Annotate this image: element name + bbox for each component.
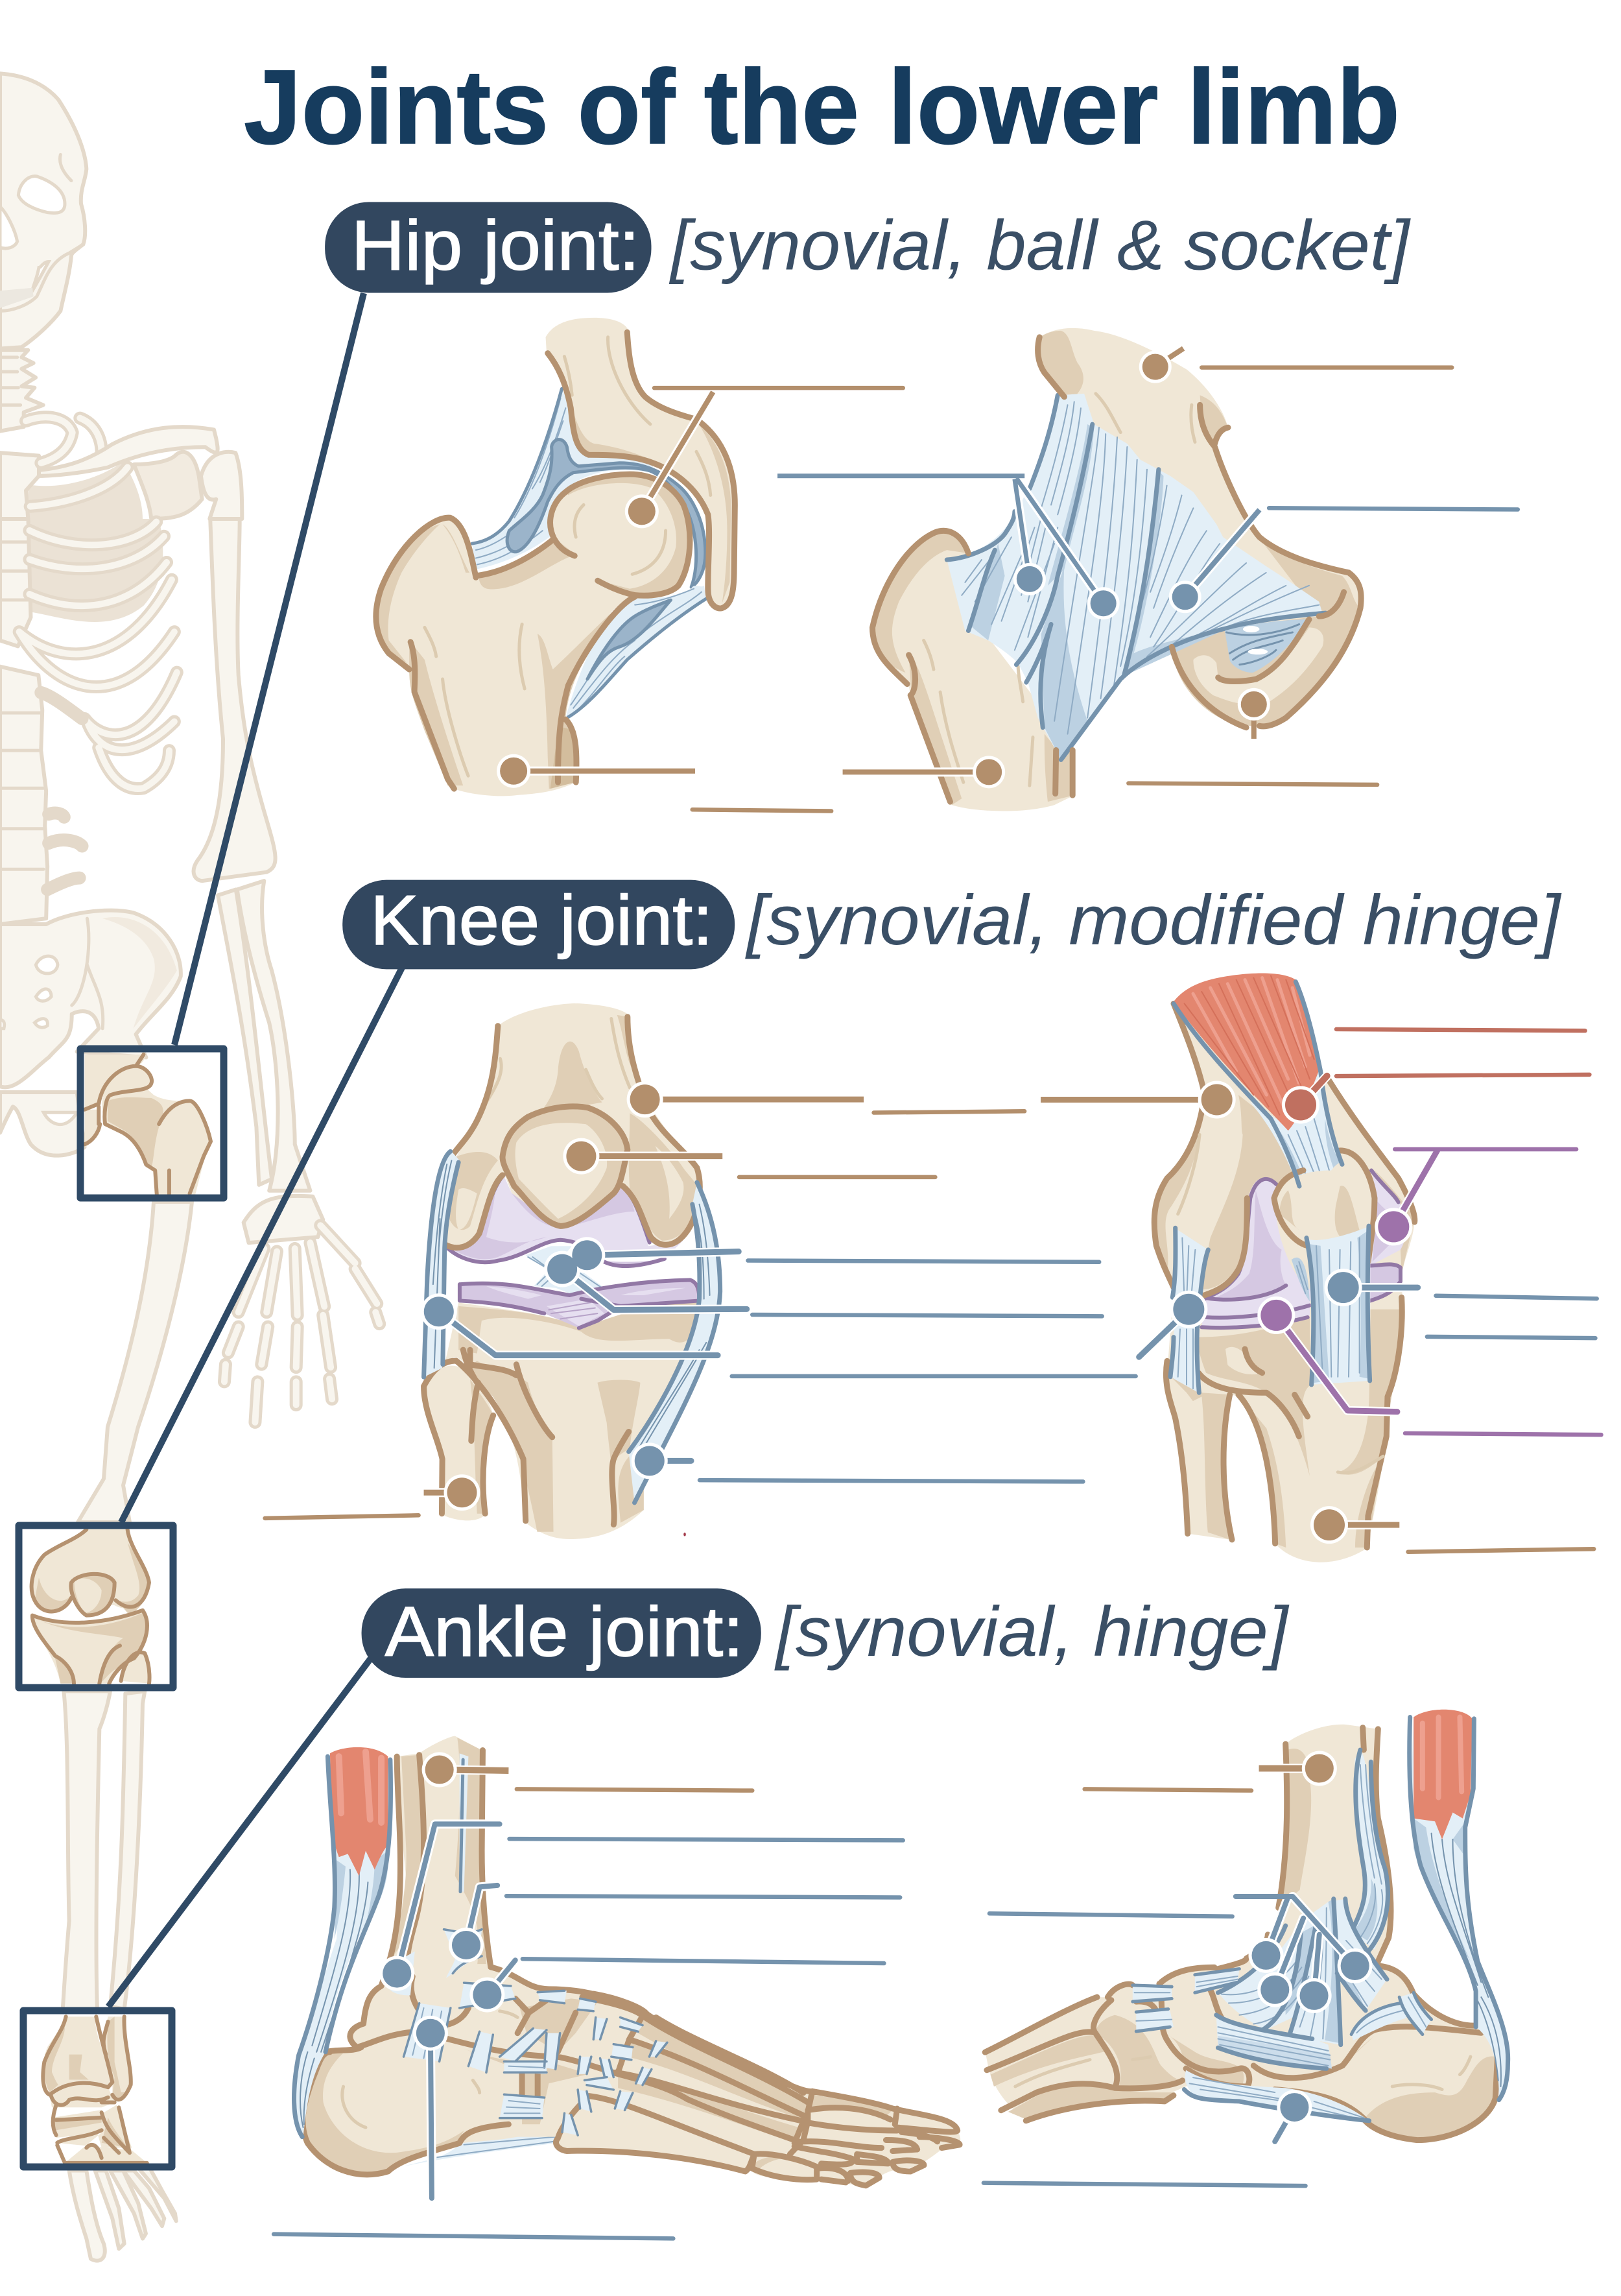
title: Joints of the lower limb [244,47,1400,166]
callouts: medial foot [1236,1769,1355,2142]
thumbnail: hip box [84,1055,211,1197]
section heading: ankle joint [362,1588,1290,1678]
femur shaft [78,1202,192,1522]
callouts: knee lateral [1041,1076,1438,1525]
panel: hip joint anterior ligaments [777,328,1361,811]
thumbnail: knee and ankle bones [32,1527,150,2163]
panel: knee joint lateral [1041,973,1438,1562]
faded reference skeleton [0,73,379,2261]
section heading: hip joint [325,202,1412,293]
box: hip [80,1049,224,1198]
callouts: hip anterior [777,348,1259,772]
section heading: ankle joint: [synovial, hinge] [774,1592,1290,1671]
lower leg and toes [63,1691,176,2261]
box: ankle [23,2011,172,2167]
section heading: knee joint [342,880,1562,969]
callouts: lateral foot [397,1770,515,2198]
section heading: hip joint: [synovial, ball & socket] [669,206,1412,284]
knee anterior label lines [265,1111,1136,1518]
panel: knee joint anterior [424,1003,864,1539]
section heading: ankle joint: Ankle joint: [385,1592,744,1671]
ligament bands: medial foot [1133,1899,1432,2121]
ligament bands: lateral foot [381,1930,667,2135]
skull and shoulder [0,73,242,519]
torso, arm, pelvis [0,519,379,1422]
section heading: hip joint: Hip joint: [351,206,639,284]
box: knee [19,1525,173,1688]
hip joint label lines [654,368,1518,811]
lateral foot label lines [274,1789,903,2238]
callouts: hip coronal [514,392,713,771]
panel: hip joint coronal section [376,318,736,796]
section heading: knee joint: Knee joint: [370,881,713,959]
knee lateral label lines [1336,1029,1601,1552]
panel: ankle joint lateral foot [294,1736,960,2198]
section heading: knee joint: [synovial, modified hinge] [744,881,1562,959]
leader lines from headings to skeleton boxes [108,293,402,2007]
panel: ankle joint medial foot [985,1710,1508,2142]
medial foot label lines [984,1789,1306,2186]
callouts: knee anterior [424,1099,864,1492]
